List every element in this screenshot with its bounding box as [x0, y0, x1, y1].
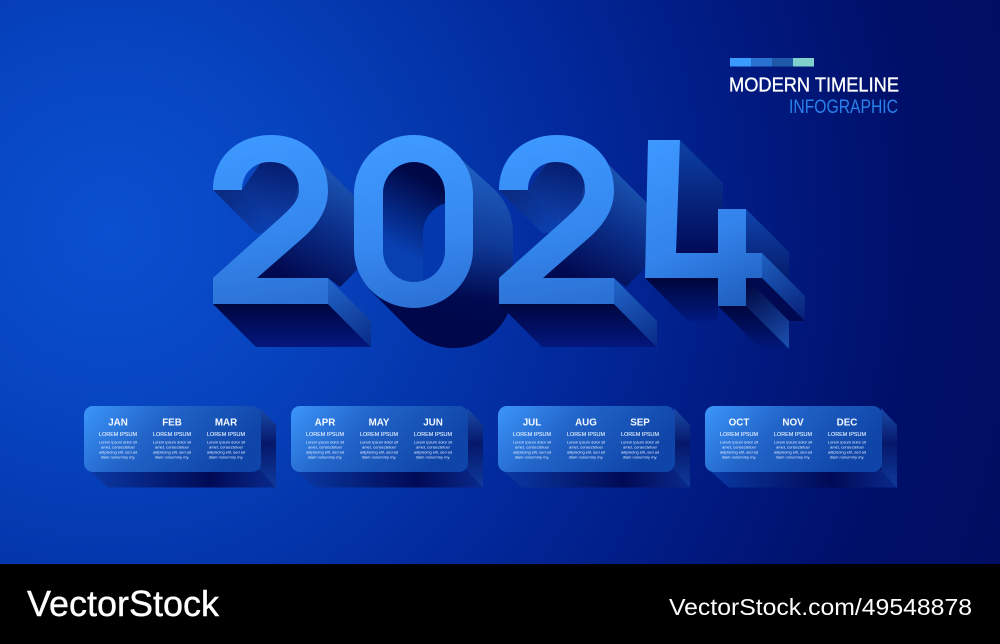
column: DEC: diam nonummy my.: [830, 454, 864, 460]
footer url: VectorStock.com/49548878: [669, 594, 972, 620]
column: AUG: Lorem ipsum dolor sit: [567, 440, 606, 444]
column: MAR: LOREM IPSUM: [207, 432, 245, 438]
column: MAY: [360, 418, 399, 460]
column: DEC: Lorem ipsum dolor sit: [828, 440, 867, 444]
column: NOV: LOREM IPSUM: [774, 432, 812, 438]
column: SEP: [621, 418, 660, 460]
column: APR: APR: [315, 418, 335, 428]
column: APR: LOREM IPSUM: [306, 432, 344, 438]
title line: MODERN TIMELINE: [729, 74, 899, 96]
column: MAR: MAR: [215, 418, 237, 428]
column: SEP: amet, consectetuer: [623, 444, 658, 450]
column: JUN: LOREM IPSUM: [414, 432, 452, 438]
panel: Q1 Jan-Mar: [84, 406, 276, 488]
column: OCT: Lorem ipsum dolor sit: [720, 440, 759, 444]
column: MAY: Lorem ipsum dolor sit: [360, 440, 399, 444]
column: SEP: SEP: [630, 418, 650, 428]
column: JUN: JUN: [423, 418, 443, 428]
panel: Q4 Oct-Dec: [705, 406, 897, 488]
column: MAR: Lorem ipsum dolor sit: [207, 440, 246, 444]
column: JUL: Lorem ipsum dolor sit: [513, 440, 552, 444]
column: JUL: [513, 418, 552, 460]
column: FEB: LOREM IPSUM: [153, 432, 191, 438]
column: APR: [306, 418, 345, 460]
panel: Q3 Jul-Sep: [498, 406, 690, 488]
column: AUG: [567, 418, 606, 460]
column: MAR: adipiscing elit, sed ad: [207, 450, 245, 454]
column: JAN: Lorem ipsum dolor sit: [99, 440, 138, 444]
column: NOV: Lorem ipsum dolor sit: [774, 440, 813, 444]
column: FEB: amet, consectetuer: [155, 444, 190, 450]
column: MAY: MAY: [369, 418, 390, 428]
column: AUG: diam nonummy my.: [569, 454, 603, 460]
column: JAN: LOREM IPSUM: [99, 432, 137, 438]
column: APR: amet, consectetuer: [308, 444, 343, 450]
column: NOV: NOV: [782, 418, 804, 428]
column: JUN: Lorem ipsum dolor sit: [414, 440, 453, 444]
column: AUG: amet, consectetuer: [569, 444, 604, 450]
column: AUG: AUG: [575, 418, 597, 428]
column: SEP: diam nonummy my.: [623, 454, 657, 460]
column: DEC: adipiscing elit, sed ad: [828, 450, 866, 454]
column: FEB: [153, 418, 192, 460]
column: JUN: adipiscing elit, sed ad: [414, 450, 452, 454]
column: APR: adipiscing elit, sed ad: [306, 450, 344, 454]
footer logo: VectorStock: [27, 583, 220, 624]
column: SEP: LOREM IPSUM: [621, 432, 659, 438]
column: MAY: adipiscing elit, sed ad: [360, 450, 398, 454]
header: modern timeline title: [729, 58, 899, 118]
column: JAN: adipiscing elit, sed ad: [99, 450, 137, 454]
column: NOV: [774, 418, 813, 460]
column: JAN: diam nonummy my.: [101, 454, 135, 460]
column: FEB: Lorem ipsum dolor sit: [153, 440, 192, 444]
big year 2024: [213, 135, 805, 349]
column: MAY: amet, consectetuer: [362, 444, 397, 450]
column: DEC: [828, 418, 867, 460]
column: DEC: LOREM IPSUM: [828, 432, 866, 438]
column: MAY: diam nonummy my.: [362, 454, 396, 460]
column: DEC: amet, consectetuer: [830, 444, 865, 450]
subtitle line: INFOGRAPHIC: [789, 97, 898, 118]
column: JUL: amet, consectetuer: [515, 444, 550, 450]
column: OCT: OCT: [729, 418, 749, 428]
column: OCT: amet, consectetuer: [722, 444, 757, 450]
column: SEP: adipiscing elit, sed ad: [621, 450, 659, 454]
column: APR: Lorem ipsum dolor sit: [306, 440, 345, 444]
footer bar: [0, 564, 1000, 644]
column: JAN: [99, 418, 138, 460]
column: OCT: diam nonummy my.: [722, 454, 756, 460]
column: JUN: diam nonummy my.: [416, 454, 450, 460]
column: MAR: [207, 418, 246, 460]
column: OCT: LOREM IPSUM: [720, 432, 758, 438]
column: OCT: [720, 418, 759, 460]
digit 2 (first): [213, 135, 371, 348]
digit 2 (second): [499, 135, 657, 348]
column: NOV: diam nonummy my.: [776, 454, 810, 460]
column: SEP: Lorem ipsum dolor sit: [621, 440, 660, 444]
column: FEB: FEB: [162, 418, 182, 428]
column: AUG: adipiscing elit, sed ad: [567, 450, 605, 454]
column: JUN: [414, 418, 453, 460]
column: DEC: DEC: [837, 418, 857, 428]
column: APR: diam nonummy my.: [308, 454, 342, 460]
column: JUL: JUL: [523, 418, 541, 428]
column: FEB: diam nonummy my.: [155, 454, 189, 460]
column: NOV: amet, consectetuer: [776, 444, 811, 450]
colour swatch bar: [730, 58, 814, 66]
column: OCT: adipiscing elit, sed ad: [720, 450, 758, 454]
column: JUN: amet, consectetuer: [416, 444, 451, 450]
column: MAR: diam nonummy my.: [209, 454, 243, 460]
column: MAY: LOREM IPSUM: [360, 432, 398, 438]
column: JUL: LOREM IPSUM: [513, 432, 551, 438]
column: JAN: amet, consectetuer: [101, 444, 136, 450]
panel: Q2 Apr-Jun: [291, 406, 483, 488]
column: JUL: adipiscing elit, sed ad: [513, 450, 551, 454]
column: MAR: amet, consectetuer: [209, 444, 244, 450]
column: FEB: adipiscing elit, sed ad: [153, 450, 191, 454]
column: NOV: adipiscing elit, sed ad: [774, 450, 812, 454]
digit 4: [645, 140, 805, 349]
digit 0: [354, 135, 513, 348]
column: JUL: diam nonummy my.: [515, 454, 549, 460]
column: JAN: JAN: [108, 418, 128, 428]
column: AUG: LOREM IPSUM: [567, 432, 605, 438]
